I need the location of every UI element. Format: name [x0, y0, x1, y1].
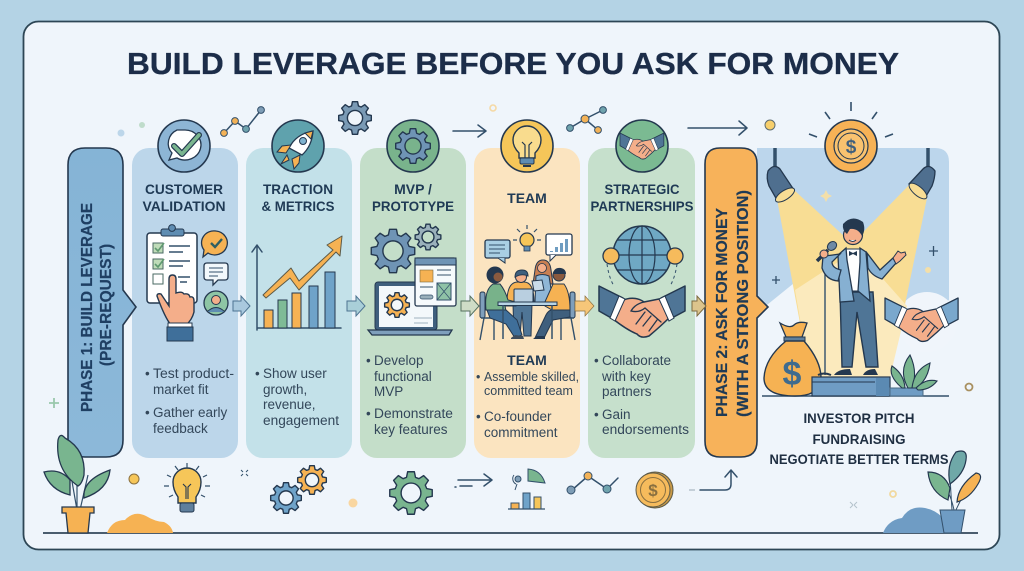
spotlight beams: [777, 184, 927, 377]
man in centre: [507, 270, 534, 336]
bullets: •: [255, 366, 260, 381]
bullets: Gain: [602, 407, 631, 422]
phase 2 bar: PHASE 2: ASK FOR MONEY: [714, 207, 731, 417]
bullets: endorsements: [602, 422, 689, 437]
bullets: with key: [601, 369, 651, 384]
outcome text: FUNDRAISING: [812, 431, 906, 447]
woman standing: [532, 260, 553, 302]
bullets: feedback: [153, 421, 208, 436]
arrow 2: [347, 296, 365, 316]
plant left: [44, 435, 110, 533]
stage handshake: [885, 298, 958, 341]
top decorations: [118, 102, 775, 137]
phase 2 bar: [705, 148, 768, 457]
icon: gear: [387, 120, 439, 172]
panel: strategic partnerships: [588, 120, 695, 458]
illustration: globe and handshake: [599, 226, 685, 337]
bullets: engagement: [263, 413, 339, 428]
speech bubble: [485, 240, 510, 263]
illustration: checklist: [147, 225, 228, 341]
bullets: Assemble skilled,: [484, 370, 579, 384]
bullets: partners: [602, 384, 652, 399]
arrow 5: [692, 296, 706, 316]
outcome text: INVESTOR PITCH: [804, 410, 914, 426]
panel: phase 1: PHASE 1: BUILD LEVERAGE: [79, 203, 96, 412]
bullets: functional: [374, 369, 432, 384]
icon: coin: $: [846, 137, 857, 158]
cloud: [897, 292, 957, 352]
podium: [812, 377, 923, 396]
icon: handshake badge: [616, 120, 668, 172]
coin: $: [648, 481, 658, 500]
icon: coin: [809, 102, 893, 172]
idea bulb: [513, 225, 541, 251]
bullets: Demonstrate: [374, 406, 453, 421]
heading: TRACTION: [263, 181, 333, 197]
gears: [271, 483, 301, 513]
bush orange: [107, 514, 173, 533]
phase 2 bar: (WITH A STRONG POSITION): [735, 190, 752, 417]
bullets: growth,: [263, 382, 307, 397]
chart bubble: [546, 234, 572, 261]
icon: rocket: [272, 120, 324, 172]
heading: & METRICS: [262, 198, 334, 214]
bullets: •: [594, 353, 599, 368]
bullets: revenue,: [263, 397, 316, 412]
illustration: laptop and gears: [368, 224, 456, 335]
arrow 4: [575, 296, 594, 316]
heading: TEAM: [507, 190, 547, 206]
mini chart: [508, 469, 545, 509]
bullets: committed team: [484, 384, 573, 398]
bullets: •: [476, 409, 481, 424]
bullets: key features: [374, 422, 448, 437]
money bag: [764, 322, 821, 396]
plant right: [883, 451, 981, 533]
sparkles: [772, 190, 938, 284]
right person: [533, 268, 570, 339]
icon: speech check: [158, 120, 210, 172]
panel: customer validation: [132, 120, 238, 458]
bullets: commitment: [484, 425, 558, 440]
panel: MVP prototype: [360, 120, 466, 458]
line nodes: [567, 472, 618, 494]
arrow 3: [461, 296, 479, 316]
lamps: [767, 148, 935, 205]
panel: traction and metrics: [246, 120, 352, 458]
sub-heading: TEAM: [507, 352, 547, 368]
bullets: Co-founder: [484, 409, 552, 424]
chart: growth bars: [252, 236, 342, 330]
heading: PROTOTYPE: [372, 198, 454, 214]
bullets: •: [594, 407, 599, 422]
title: BUILD LEVERAGE BEFORE YOU ASK FOR MONEY: [127, 46, 899, 81]
heading: VALIDATION: [142, 198, 226, 214]
heading: PARTNERSHIPS: [590, 198, 694, 214]
bullets: •: [145, 366, 150, 381]
icon: bulb: [501, 120, 553, 172]
heading: CUSTOMER: [145, 181, 223, 197]
heading: STRATEGIC: [604, 181, 680, 197]
bullets: Test product-: [153, 366, 234, 381]
table and laptop: [498, 289, 557, 339]
bulb: [164, 463, 210, 512]
left person: [486, 266, 524, 339]
bullets: MVP: [374, 384, 403, 399]
speaker: [817, 218, 906, 375]
bullets: •: [366, 406, 371, 421]
bullets: •: [366, 353, 371, 368]
money bag: $: [783, 355, 802, 393]
ground line: [762, 395, 949, 397]
chairs: [480, 292, 575, 340]
coin: [636, 472, 673, 508]
outcome text: NEGOTIATE BETTER TERMS: [770, 451, 948, 467]
panel: phase 2 stage: [705, 102, 958, 467]
bullets: Collaborate: [602, 353, 671, 368]
heading: MVP /: [394, 181, 432, 197]
panel: phase 1: (PRE-REQUEST): [98, 244, 115, 366]
illustration: team at table: [480, 225, 575, 340]
bullets: market fit: [153, 382, 209, 397]
bottom decorations: [43, 384, 981, 533]
stage plant: [891, 355, 937, 390]
bullets: Develop: [374, 353, 424, 368]
bullets: •: [145, 405, 150, 420]
panel: team: [474, 120, 580, 458]
panel: phase 1: [68, 148, 136, 457]
bullets: •: [476, 370, 480, 384]
bullets: Gather early: [153, 405, 228, 420]
bullets: Show user: [263, 366, 327, 381]
stage backdrop: [757, 148, 949, 340]
arrow 1: [233, 296, 250, 316]
